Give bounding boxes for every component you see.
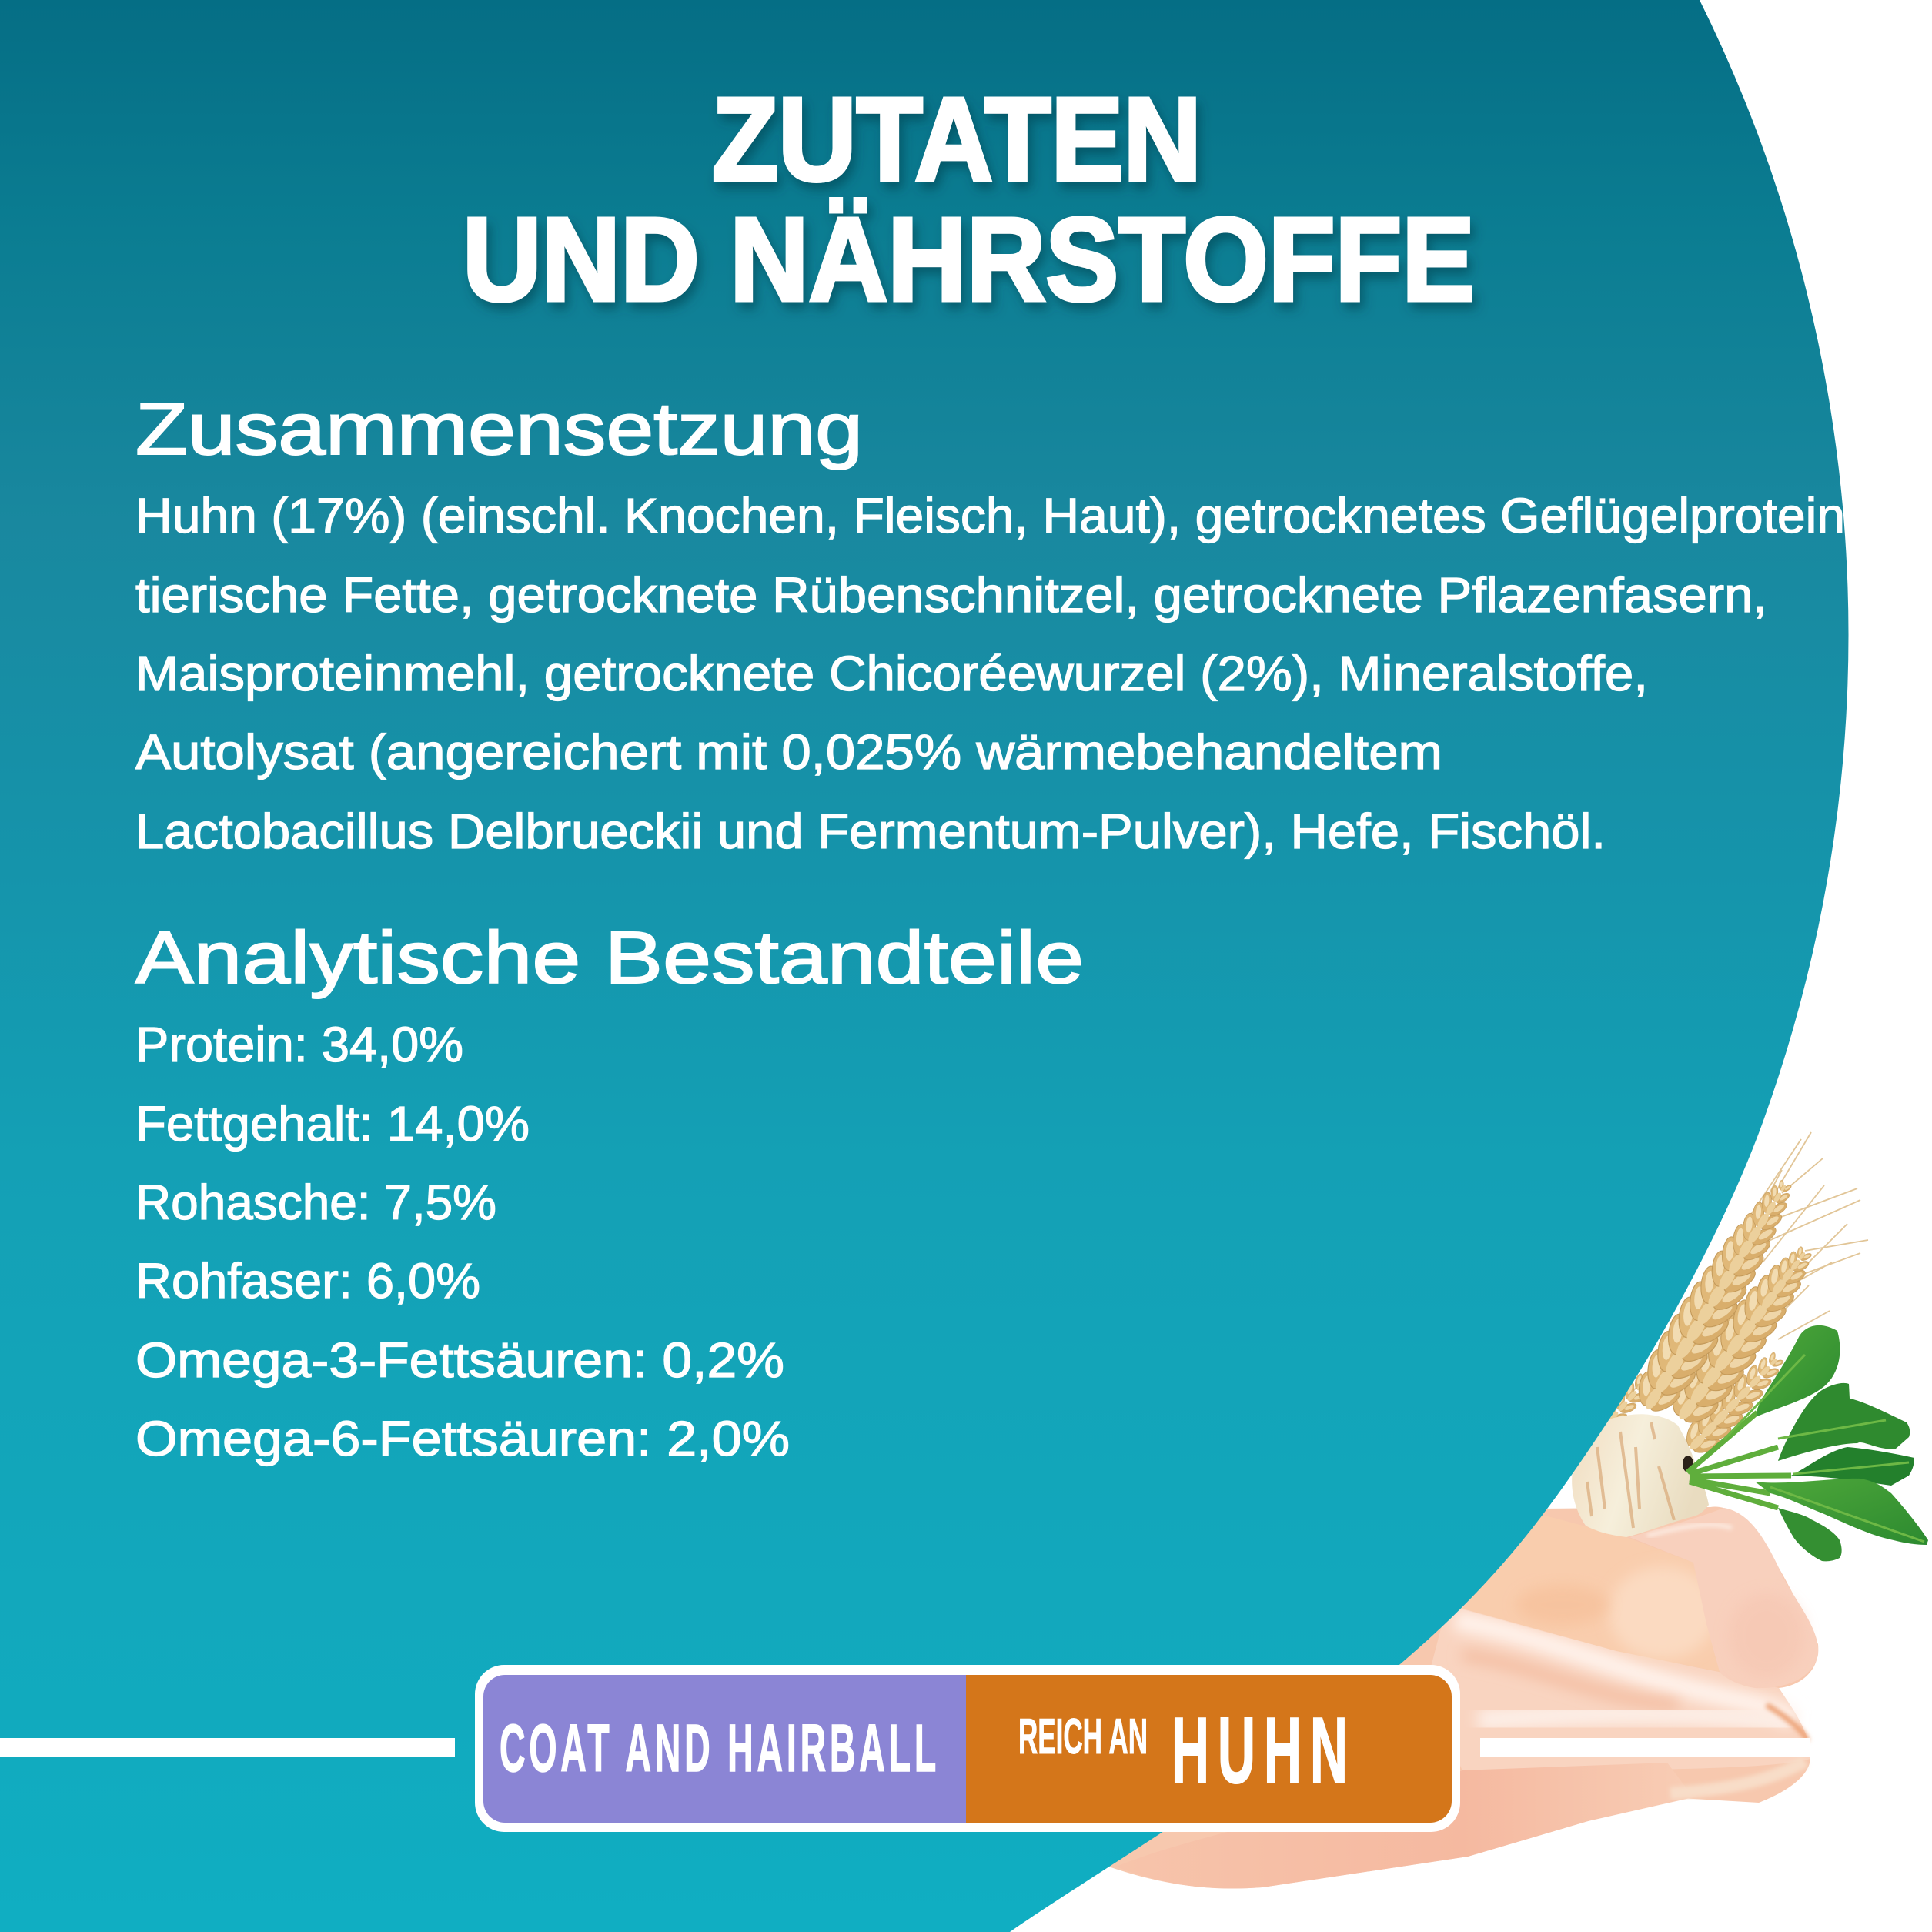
illustration: ingredients behind the panel: [1078, 1132, 1928, 1888]
badge white frame: [475, 1665, 1460, 1832]
badge left segment: purple: [483, 1675, 966, 1823]
text block: composition: [135, 488, 1845, 859]
text block: analytical constituents: Omega-3-Fettsäuren: 0,2%: [135, 1332, 784, 1388]
badge: [475, 1665, 1460, 1832]
badge label: chicken: HUHN: [1172, 1698, 1356, 1803]
text block: composition: Lactobacillus Delbrueckii und Fermentum-Pulver), Hefe, Fischöl.: [135, 804, 1606, 859]
right white line: [1480, 1738, 1810, 1757]
parsley root: [1572, 1414, 1709, 1537]
text block: composition: tierische Fette, getrocknete Rübenschnitzel, getrocknete Pflazenfasern,: [135, 567, 1767, 623]
title line 2: UND NÄHRSTOFFE: [463, 193, 1475, 326]
wheat ear: lower: [1676, 1342, 1794, 1464]
wheat awns: [1632, 1132, 1868, 1393]
chicken meat: [1078, 1506, 1818, 1888]
text block: composition: Autolysat (angereichert mit 0,025% wärmebehandeltem: [135, 724, 1442, 780]
text block: analytical constituents: Rohfaser: 6,0%: [135, 1253, 480, 1309]
text block: analytical constituents: Protein: 34,0%: [135, 1017, 463, 1072]
left white line: [0, 1738, 455, 1757]
title line 1: ZUTATEN: [712, 73, 1202, 206]
text block: analytical constituents: [135, 1017, 790, 1466]
badge label: rich in: REICH AN: [1018, 1708, 1148, 1764]
text block: analytical constituents: Omega-6-Fettsäuren: 2,0%: [135, 1411, 790, 1466]
text block: composition: Maisproteinmehl, getrocknete Chicoréewurzel (2%), Mineralstoffe,: [135, 646, 1648, 701]
title: [463, 73, 1475, 326]
badge label: product line: COAT AND HAIRBALL: [500, 1711, 940, 1786]
wheat ear: main: [1620, 1166, 1813, 1426]
wheat ear: rear: [1599, 1370, 1657, 1430]
leaf stems and blades: [1687, 1325, 1928, 1561]
badge right segment: orange: [966, 1675, 1452, 1823]
heading: Analytische Bestandteile: Analytische Bestandteile: [135, 917, 1084, 999]
text block: analytical constituents: Rohasche: 7,5%: [135, 1175, 496, 1230]
wheat ear: right: [1656, 1232, 1830, 1438]
heading: Zusammensetzung: Zusammensetzung: [135, 388, 863, 470]
text block: analytical constituents: Fettgehalt: 14,0%: [135, 1096, 530, 1152]
text block: composition: Huhn (17%) (einschl. Knochen, Fleisch, Haut), getrocknetes Geflügelprotein: [135, 488, 1845, 543]
